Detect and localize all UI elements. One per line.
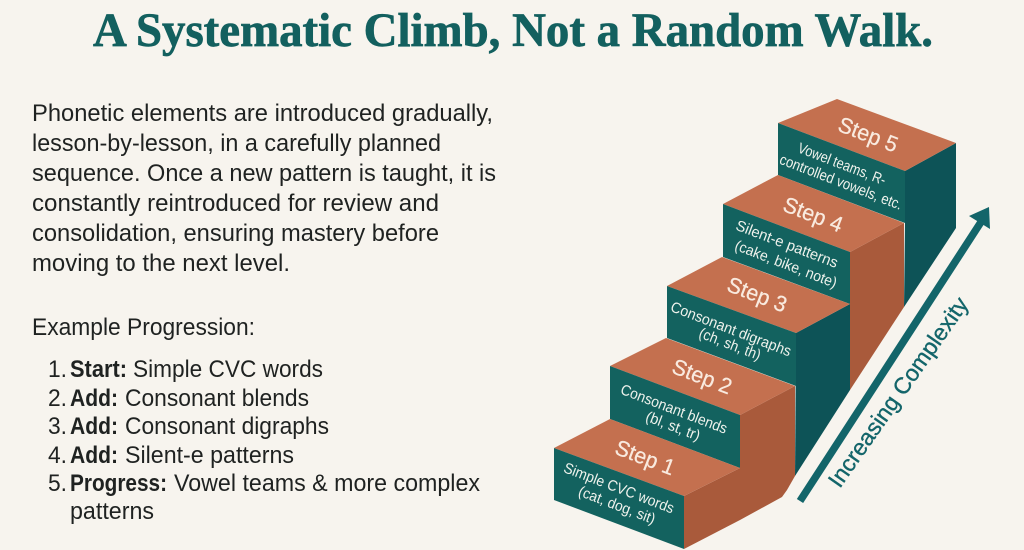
arrow: increasing complexity — [800, 207, 990, 501]
heading: example progression: Example Progression: — [32, 314, 255, 341]
numbered list: progression: patterns — [70, 498, 154, 525]
title: A Systematic Climb, Not a Random Walk. — [93, 4, 933, 57]
text block: introduction: lesson-by-lesson, in a carefully planned — [32, 130, 441, 157]
numbered list: progression: Silent-e patterns — [125, 442, 294, 469]
step 2 block — [610, 338, 795, 520]
numbered list: progression: 3. — [48, 413, 67, 440]
step 4 block: (cake, bike, note) — [732, 237, 839, 292]
step 5 block: controlled vowels, etc. — [777, 151, 905, 214]
numbered list: progression: 5. — [48, 470, 67, 497]
step 3 block — [667, 257, 850, 476]
step 2 block: Step 2 — [669, 354, 736, 399]
numbered list: progression: Start: — [70, 356, 127, 383]
numbered list: progression: Add: — [70, 413, 118, 440]
numbered list: progression — [48, 356, 480, 525]
numbered list: progression: 1. — [48, 356, 67, 383]
step 5 block: Vowel teams, R- — [795, 140, 888, 189]
step 1 block: (cat, dog, sit) — [576, 483, 658, 528]
step 2 block: (bl, st, tr) — [643, 408, 702, 445]
numbered list: progression: Add: — [70, 442, 118, 469]
numbered list: progression: Add: — [70, 385, 118, 412]
step 4 block — [723, 175, 904, 390]
numbered list: progression: Vowel teams & more complex — [174, 470, 480, 497]
step 4 block: Step 4 — [780, 192, 847, 237]
numbered list: progression: Simple CVC words — [133, 356, 323, 383]
step 1 block: Simple CVC words — [561, 460, 676, 517]
text block: introduction: consolidation, ensuring mastery before — [32, 220, 439, 247]
text block: introduction — [32, 100, 496, 277]
numbered list: progression: Progress: — [70, 470, 167, 497]
step 4 block: Silent-e patterns — [733, 217, 840, 272]
numbered list: progression: 2. — [48, 385, 67, 412]
step 1 block — [554, 419, 740, 549]
step 3 block: Step 3 — [724, 272, 791, 317]
step 5 block: Step 5 — [835, 112, 902, 157]
text block: introduction: moving to the next level. — [32, 250, 290, 277]
step 3 block: (ch, sh, th) — [696, 325, 763, 364]
step 5 block — [777, 99, 956, 307]
text block: introduction: Phonetic elements are introduced gradually, — [32, 100, 493, 127]
arrow label: Increasing Complexity — [823, 292, 974, 492]
text block: introduction: sequence. Once a new pattern is taught, it is — [32, 160, 496, 187]
step 2 block: Consonant blends — [618, 381, 730, 438]
numbered list: progression: Consonant digraphs — [125, 413, 329, 440]
step 1 block: Step 1 — [612, 435, 679, 480]
step 3 block: Consonant digraphs — [668, 299, 794, 360]
text block: introduction: constantly reintroduced for review and — [32, 190, 439, 217]
staircase diagram — [554, 99, 956, 549]
numbered list: progression: 4. — [48, 442, 67, 469]
numbered list: progression: Consonant blends — [125, 385, 309, 412]
